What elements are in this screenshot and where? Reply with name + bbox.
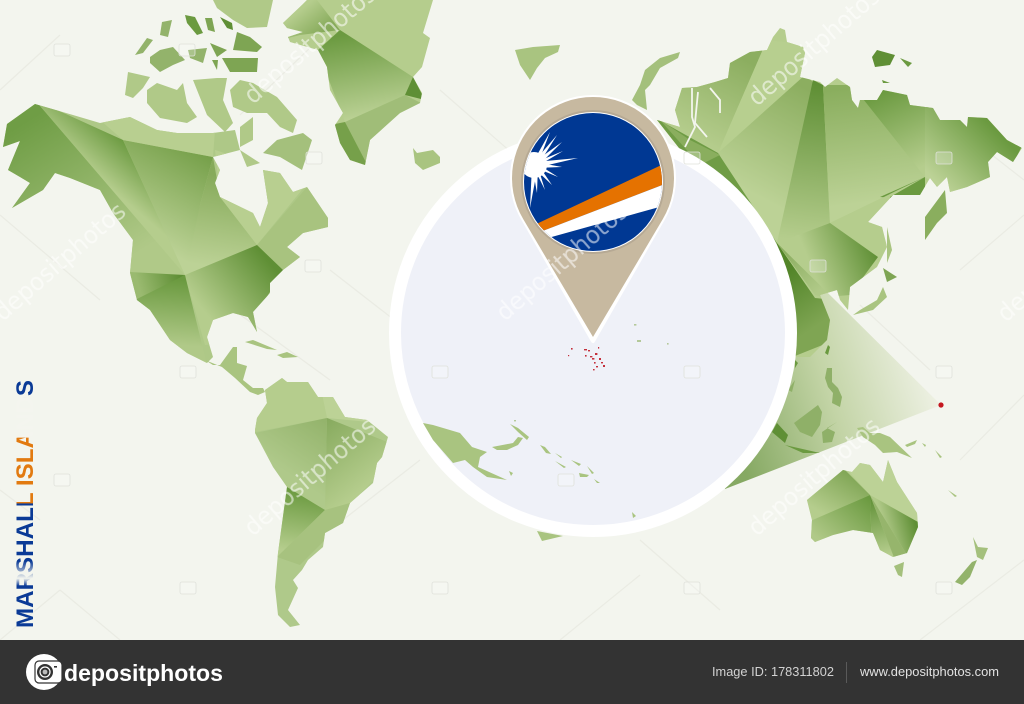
map: Sakhalin, Japan and Russian Arctic islands	[853, 50, 947, 315]
watermark text: depositphotos	[238, 411, 381, 542]
magnified map: New Guinea and Pacific islands	[423, 423, 636, 518]
website url: www.depositphotos.com	[859, 665, 999, 679]
watermark camera icons	[54, 44, 952, 594]
map: Novaya Zemlya	[632, 52, 680, 110]
logo wordmark: depositphotos	[64, 660, 223, 686]
location pin with flag	[512, 97, 674, 341]
image id: Image ID: 178311802	[712, 665, 834, 679]
small islands near pin	[514, 324, 669, 421]
map: South America	[255, 378, 388, 627]
map: Australia	[807, 460, 918, 577]
Tasmania	[894, 562, 904, 577]
Central America	[205, 347, 265, 395]
map: New Zealand	[955, 537, 988, 585]
Caribbean islands	[245, 340, 298, 358]
pin body	[512, 97, 674, 341]
map: Iceland	[413, 148, 440, 170]
icon: depositphotos camera logo	[26, 654, 62, 690]
river gulfs	[685, 88, 720, 147]
map: Southeast Asia islands	[772, 345, 957, 497]
footer bar	[0, 640, 1024, 704]
map: Eurasia	[650, 25, 1024, 370]
flag of the Marshall Islands	[523, 112, 663, 252]
watermark text: depositphotos	[490, 196, 633, 327]
title: Marshall Islands: MARSHALL ISLANDS	[12, 380, 39, 628]
watermark text: depositphotos	[742, 411, 885, 542]
map fragment below circle	[537, 531, 563, 541]
watermark text	[0, 0, 1024, 542]
map: Scandinavia	[515, 45, 560, 80]
magnified circle	[395, 135, 791, 531]
map: Canadian Arctic islands	[125, 0, 312, 170]
map: Greenland	[280, 0, 440, 170]
zoom beam to Marshall Islands	[700, 243, 941, 489]
map: North America	[0, 95, 340, 395]
magnified Marshall Islands (red atolls)	[568, 347, 605, 370]
marker: Marshall Islands on world map	[938, 402, 944, 408]
